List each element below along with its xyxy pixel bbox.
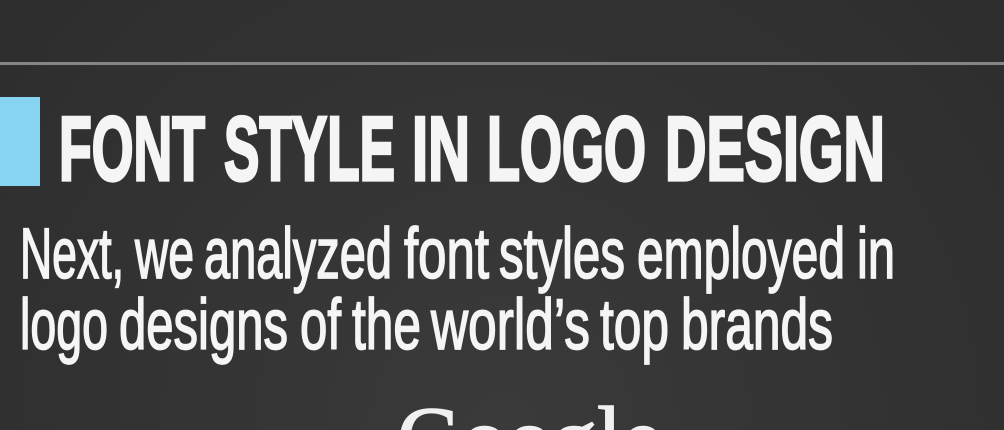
heading: DESIGN <box>665 99 885 200</box>
subtitle line 2: top <box>600 286 669 365</box>
heading: LOGO <box>487 99 646 200</box>
subtitle line 2: the <box>352 286 421 365</box>
subtitle line 1: we <box>134 215 194 294</box>
heading: IN <box>412 99 470 200</box>
subtitle line 1: analyzed <box>204 215 392 294</box>
subtitle text block <box>20 215 895 365</box>
subtitle line 1: font <box>404 215 489 294</box>
subtitle line 1 <box>20 215 895 294</box>
subtitle line 2: designs <box>119 286 288 365</box>
subtitle line 2: logo <box>20 286 108 365</box>
subtitle line 1: Next, <box>20 215 124 294</box>
heading: FONT <box>59 99 205 200</box>
subtitle line 2: of <box>300 286 341 365</box>
subtitle line 2: brands <box>681 286 833 365</box>
subtitle line 1: styles <box>499 215 625 294</box>
subtitle line 1: in <box>857 215 895 294</box>
subtitle line 1: employed <box>637 215 845 294</box>
subtitle line 2: world’s <box>430 286 590 365</box>
heading: STYLE <box>224 99 395 200</box>
blue heading marker <box>0 97 40 186</box>
subtitle line 2 <box>20 286 833 365</box>
heading <box>59 99 885 200</box>
